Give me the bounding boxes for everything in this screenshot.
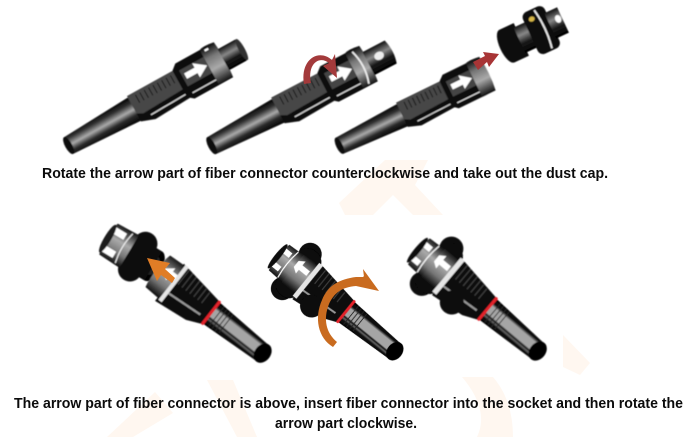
- connector 4: inserting into socket: [140, 252, 282, 378]
- dust cap: [491, 0, 573, 70]
- arrow: clockwise rotation: [318, 269, 379, 347]
- connector 6: locked: [393, 221, 566, 383]
- connector 3: cap removed: [328, 52, 499, 164]
- connector 1: closed with dust cap: [55, 30, 254, 165]
- caption: step two: The arrow part of fiber connector is above, insert fiber connector into the socket and then rotate the: [14, 396, 683, 412]
- arrow: insert direction: [147, 258, 175, 283]
- connector 2: rotating cap: [199, 32, 402, 165]
- connector 5: twisting clockwise: [254, 228, 422, 382]
- arrow: pull off direction: [473, 52, 499, 70]
- caption: step two: arrow part clockwise.: [275, 416, 417, 432]
- caption: step one: Rotate the arrow part of fiber connector counterclockwise and take out the dust cap.: [42, 166, 608, 182]
- arrow: counterclockwise rotation: [303, 54, 337, 84]
- caption: step two: [14, 396, 683, 432]
- socket separate: [91, 214, 175, 294]
- background watermark: [107, 160, 590, 437]
